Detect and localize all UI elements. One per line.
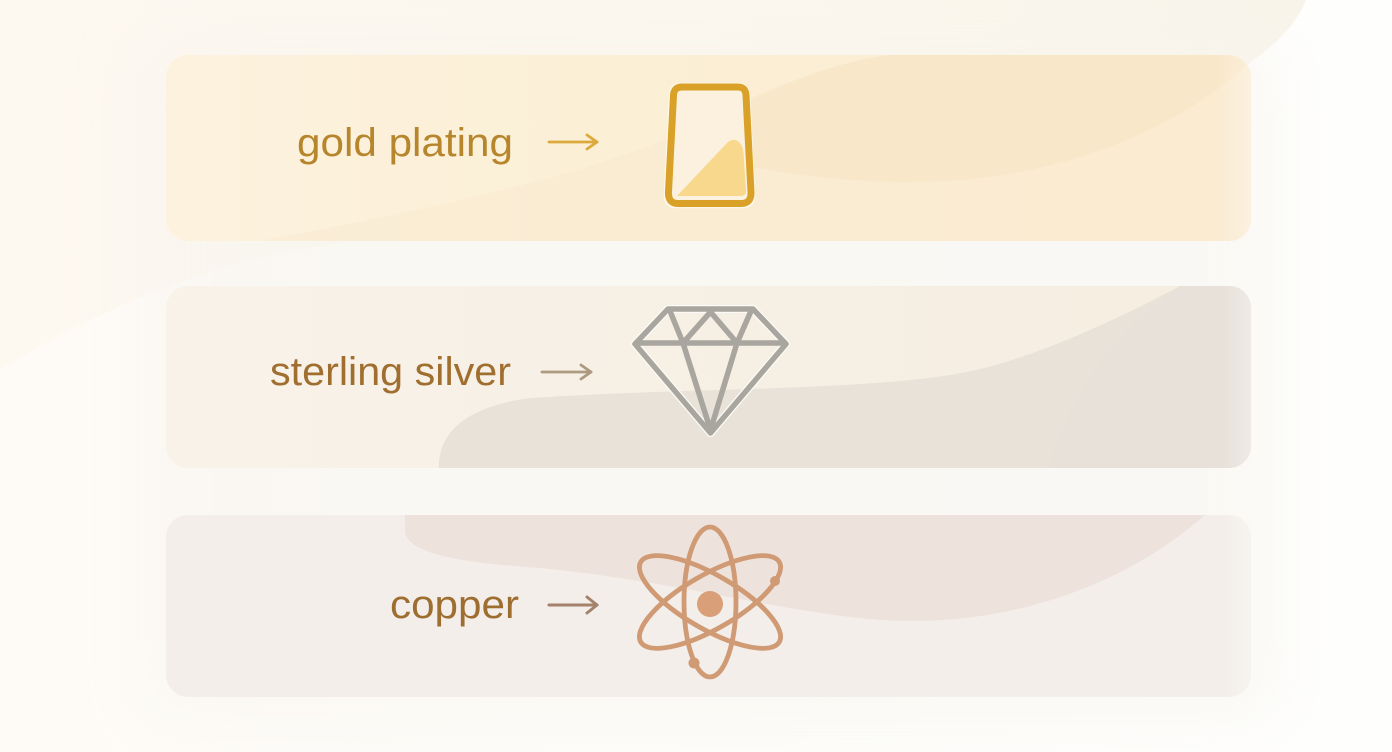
- panel: gold plating: [166, 55, 1251, 241]
- background swoosh: [0, 0, 1306, 370]
- icon: atom: [627, 527, 793, 677]
- label: copper: copper: [390, 583, 519, 627]
- icon: diamond: [635, 309, 786, 433]
- background glow: [140, 40, 1280, 720]
- icon: gold bar: [665, 84, 754, 207]
- panel: copper: [166, 515, 1251, 697]
- arrow: copper: [549, 597, 597, 613]
- arrow: gold: [549, 135, 597, 149]
- label: gold plating: gold plating: [297, 121, 513, 165]
- label: sterling silver: sterling silver: [270, 350, 511, 394]
- panel: sterling silver: [166, 286, 1251, 468]
- arrow: silver: [542, 365, 591, 379]
